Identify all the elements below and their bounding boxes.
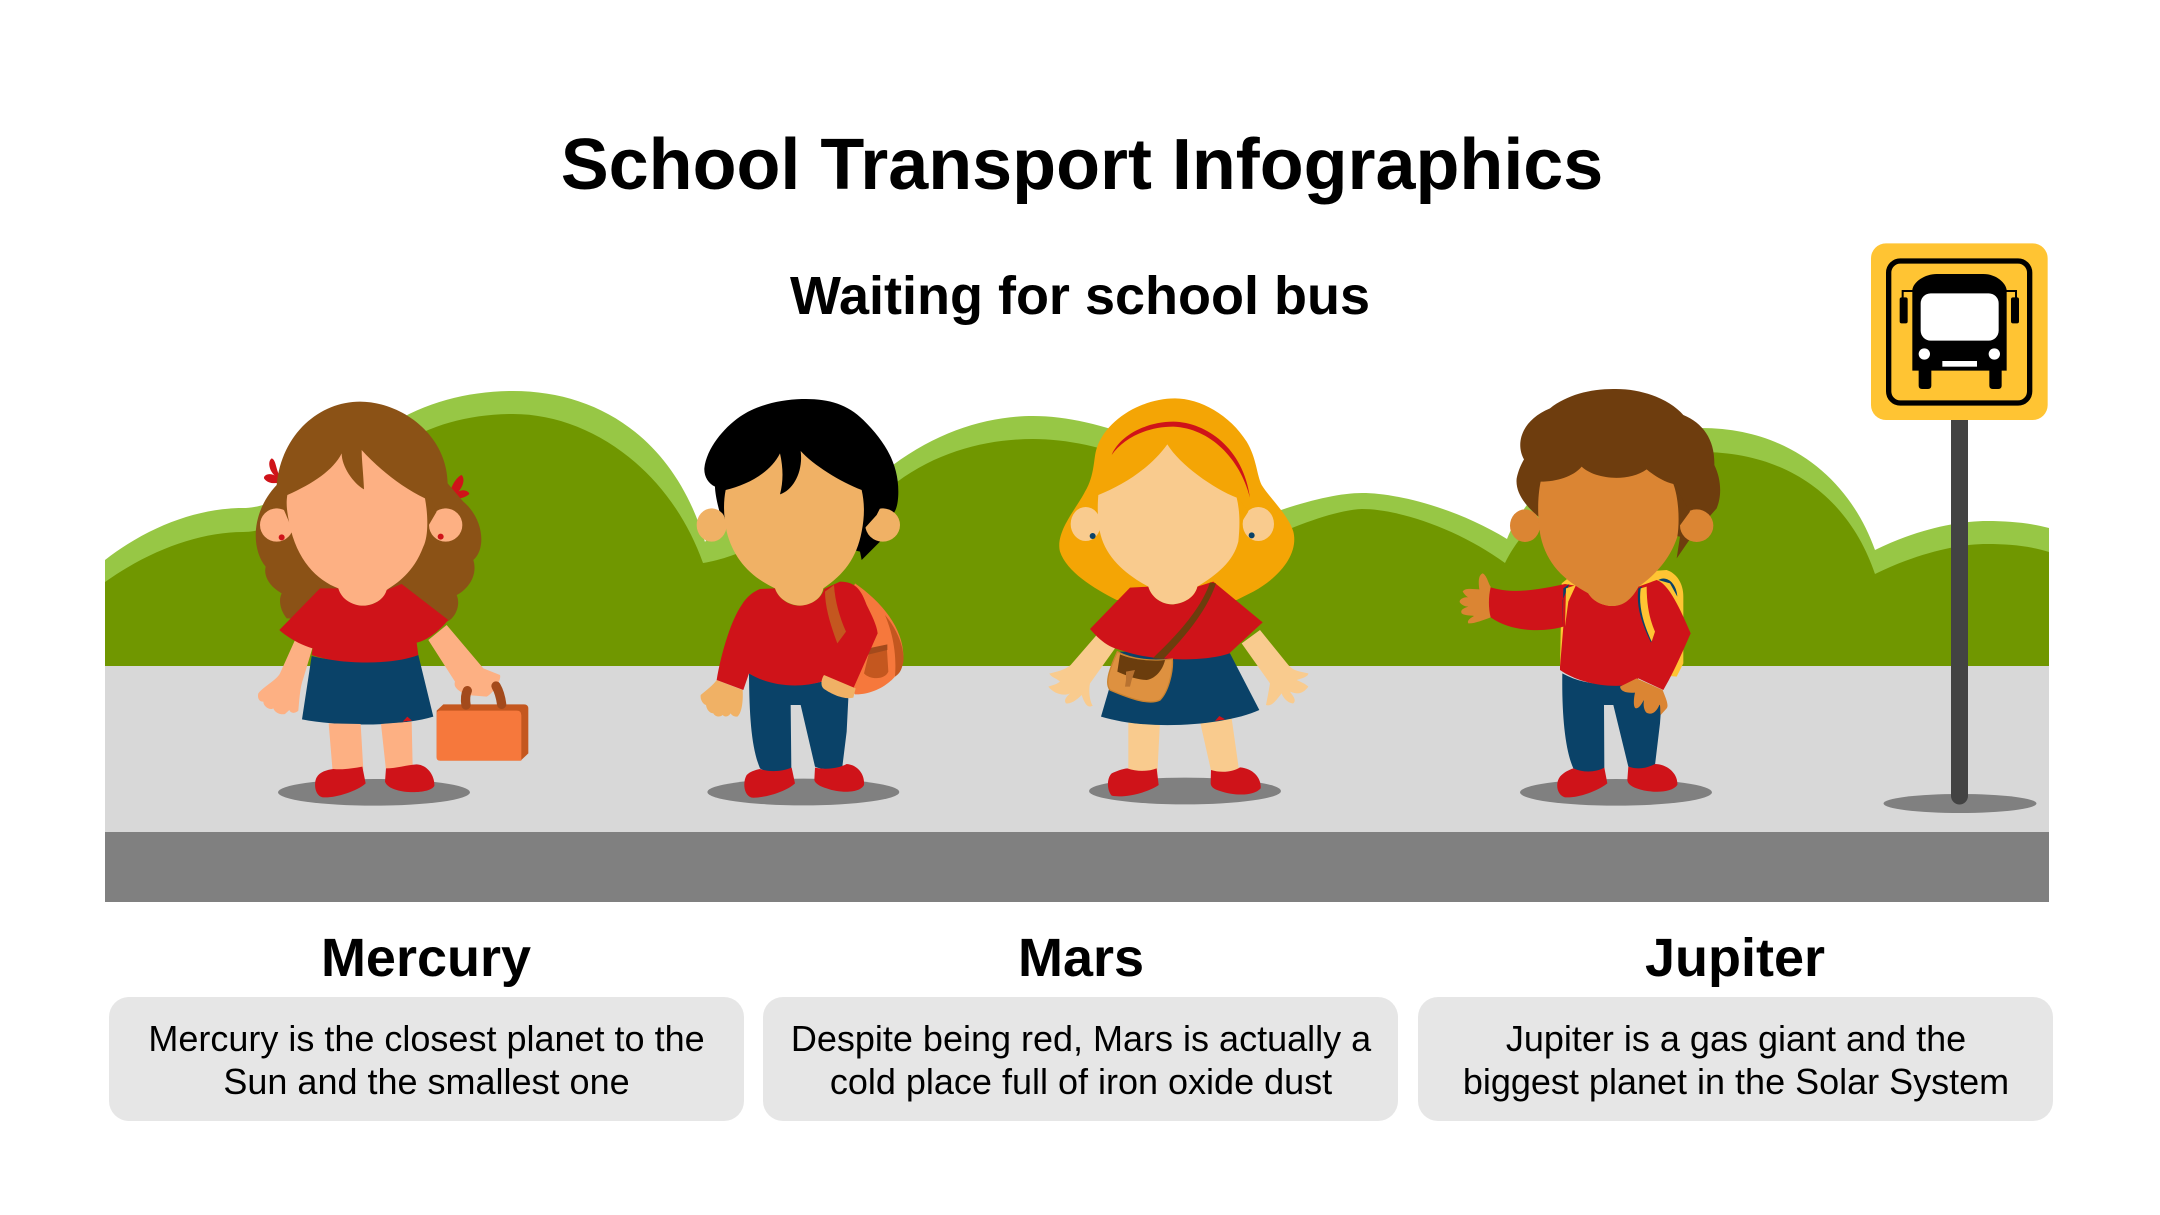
- skirt: [302, 655, 433, 725]
- heading: Jupiter: [1645, 928, 1825, 988]
- pole: [1951, 415, 1968, 804]
- shadow: [1520, 779, 1712, 806]
- lower hand: [1620, 678, 1668, 715]
- face: [724, 451, 864, 606]
- subtitle: Waiting for school bus: [790, 266, 1370, 326]
- sideburns: [715, 485, 880, 532]
- face: [287, 450, 427, 606]
- jeans: [749, 673, 848, 772]
- skirt: [1101, 652, 1259, 725]
- skirt lining: [1215, 716, 1225, 721]
- scene background: hills, sidewalk and road: [105, 391, 2049, 902]
- title: School Transport Infographics: [561, 125, 1603, 205]
- description text: biggest planet in the Solar System: [1463, 1061, 2009, 1102]
- ears: [1510, 509, 1713, 542]
- sign frame: [1889, 261, 2030, 403]
- bus stop: [1871, 243, 2048, 813]
- left arm and hand: [1048, 635, 1115, 707]
- hair: [1059, 398, 1294, 600]
- headband: [1112, 422, 1250, 498]
- description card: [763, 997, 1398, 1121]
- sign plate: [1871, 243, 2048, 420]
- hills light outline: [105, 391, 2049, 666]
- description text: Despite being red, Mars is actually a: [791, 1018, 1372, 1059]
- column: Mercury: [109, 928, 744, 1121]
- left hand: [701, 680, 743, 717]
- character: blonde girl with satchel: [1048, 398, 1308, 804]
- description text: cold place full of iron oxide dust: [830, 1061, 1332, 1102]
- legs: [1128, 718, 1239, 773]
- backpack straps: [1563, 584, 1655, 643]
- right arm and hand: [1242, 630, 1308, 705]
- shoes: [315, 764, 434, 797]
- ears: [260, 508, 462, 542]
- heading: Mercury: [321, 928, 531, 988]
- character: boy with backpack: [697, 399, 904, 805]
- column: Jupiter: [1418, 928, 2053, 1121]
- sideburns: [1537, 484, 1690, 530]
- description card: [109, 997, 744, 1121]
- hair ribbons: [264, 458, 469, 499]
- hair: [704, 399, 898, 560]
- description text: Sun and the smallest one: [223, 1061, 630, 1102]
- shoes: [744, 764, 864, 798]
- ears: [1071, 507, 1274, 541]
- waving hand: [1460, 573, 1491, 623]
- sideburns: [278, 493, 437, 532]
- description text: Mercury is the closest planet to the: [148, 1018, 705, 1059]
- shoes: [1557, 764, 1677, 797]
- legs: [329, 722, 413, 772]
- shadow: [707, 779, 899, 805]
- shirt: [279, 584, 448, 662]
- ears: [697, 508, 900, 542]
- arm right: [428, 625, 500, 697]
- icon: bus: [1900, 274, 2019, 389]
- shadow: [1089, 778, 1281, 804]
- face: [1538, 467, 1679, 606]
- backpack: [1560, 570, 1683, 677]
- shirt: [1489, 580, 1691, 690]
- arm left: [258, 640, 312, 714]
- sidewalk: [105, 666, 2049, 833]
- sign: [1871, 243, 2048, 420]
- shoes: [1108, 767, 1261, 796]
- hair: [1517, 389, 1720, 558]
- right hand: [821, 675, 856, 698]
- character: boy waving: [1460, 389, 1720, 806]
- hair: [256, 402, 481, 622]
- skirt lining: [403, 717, 412, 722]
- road: [105, 832, 2049, 902]
- hills dark fill: [105, 414, 2049, 666]
- backpack strap: [825, 585, 846, 643]
- lunch box: [437, 686, 528, 761]
- backpack: [827, 583, 904, 694]
- sideburns: [1097, 495, 1248, 530]
- earrings: [279, 534, 444, 540]
- description text: Jupiter is a gas giant and the: [1506, 1018, 1966, 1059]
- jeans: [1562, 673, 1662, 772]
- face: [1098, 444, 1239, 604]
- shirt: [1090, 582, 1263, 659]
- earrings: [1090, 532, 1255, 539]
- shirt: [717, 582, 878, 690]
- description card: [1418, 997, 2053, 1121]
- satchel: [1108, 582, 1216, 702]
- column: Mars: [763, 928, 1398, 1121]
- character: girl with lunch box: [256, 402, 528, 806]
- pole shadow: [1884, 794, 2036, 813]
- heading: Mars: [1018, 928, 1144, 988]
- shadow: [278, 779, 470, 806]
